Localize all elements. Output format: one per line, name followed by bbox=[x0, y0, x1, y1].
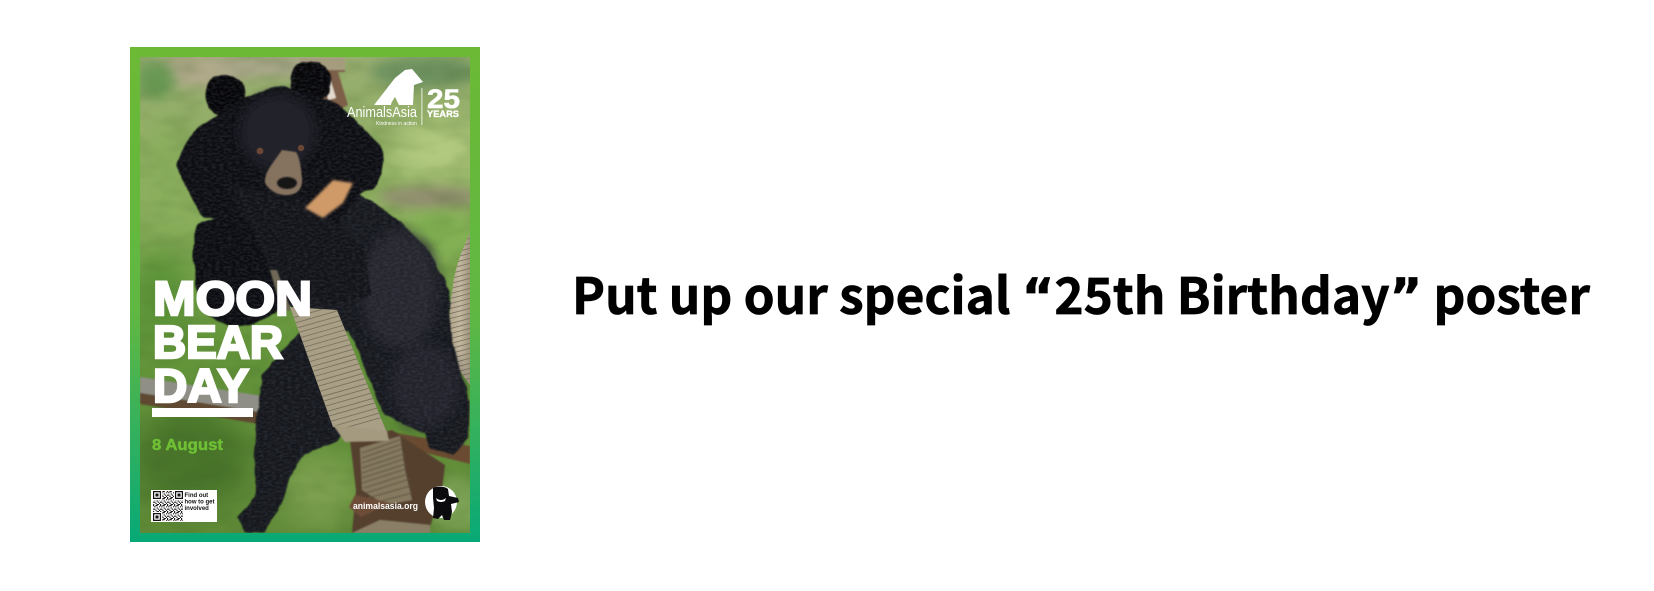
25: 25 bbox=[427, 84, 460, 114]
meadow background bbox=[130, 53, 483, 533]
headline: Moon Bear Day bbox=[153, 273, 312, 412]
face bbox=[240, 94, 316, 170]
QR code bbox=[153, 491, 183, 521]
grey branch at left bbox=[140, 377, 262, 424]
date: 8 August bbox=[152, 437, 224, 454]
mane and head bbox=[178, 86, 383, 235]
lighter fur on back bbox=[362, 230, 438, 350]
body and haunch bbox=[262, 188, 470, 455]
green gradient frame bbox=[130, 47, 480, 542]
QR call to action bbox=[151, 490, 217, 522]
hanging back leg bbox=[236, 332, 342, 533]
photo: moon bear on rope-wrapped post bbox=[130, 53, 483, 533]
left eye bbox=[257, 148, 263, 154]
right eye bbox=[298, 145, 304, 151]
day: DAY bbox=[153, 359, 249, 412]
muzzle bbox=[265, 150, 302, 195]
Animals Asia 25 years logo bbox=[347, 69, 460, 127]
poster: Moon Bear Day bbox=[130, 47, 480, 542]
left ear bbox=[205, 74, 245, 116]
rope collar at base of post bbox=[333, 425, 389, 442]
moon: MOON bbox=[153, 273, 312, 326]
bear silhouette bbox=[433, 487, 459, 520]
furry bear body bbox=[178, 61, 470, 533]
bear: BEAR bbox=[153, 316, 283, 368]
right rope post bbox=[449, 233, 470, 385]
QR text: how to get bbox=[184, 500, 214, 506]
white moon bbox=[425, 486, 457, 518]
strapline: Kindness in action bbox=[376, 121, 417, 127]
lower trunk with rope binding bbox=[349, 430, 445, 533]
rope-wrapped post in front of bear bbox=[290, 307, 387, 433]
headline underline bbox=[152, 408, 253, 417]
moon bear badge bbox=[425, 486, 459, 520]
website: animalsasia.org bbox=[353, 501, 418, 511]
white card bbox=[151, 490, 217, 522]
right ear bbox=[290, 61, 330, 103]
divider bbox=[420, 88, 423, 125]
chest mark bbox=[436, 498, 446, 502]
nose bbox=[277, 177, 297, 189]
wordmark: AnimalsAsia bbox=[347, 105, 418, 121]
forearm across chest bbox=[358, 257, 372, 298]
cream chest patch bbox=[305, 180, 353, 218]
QR text bbox=[184, 493, 214, 512]
thigh bbox=[391, 343, 459, 427]
rope strip above post bbox=[270, 270, 291, 312]
bear bbox=[178, 61, 470, 533]
years: YEARS bbox=[427, 109, 459, 120]
back left arm bbox=[192, 218, 278, 327]
QR text: Find out bbox=[184, 493, 208, 499]
top rope post behind the bear bbox=[299, 58, 348, 112]
right side branch bbox=[385, 431, 470, 464]
bear mountain mark bbox=[374, 69, 423, 105]
QR text: involved bbox=[184, 506, 209, 512]
